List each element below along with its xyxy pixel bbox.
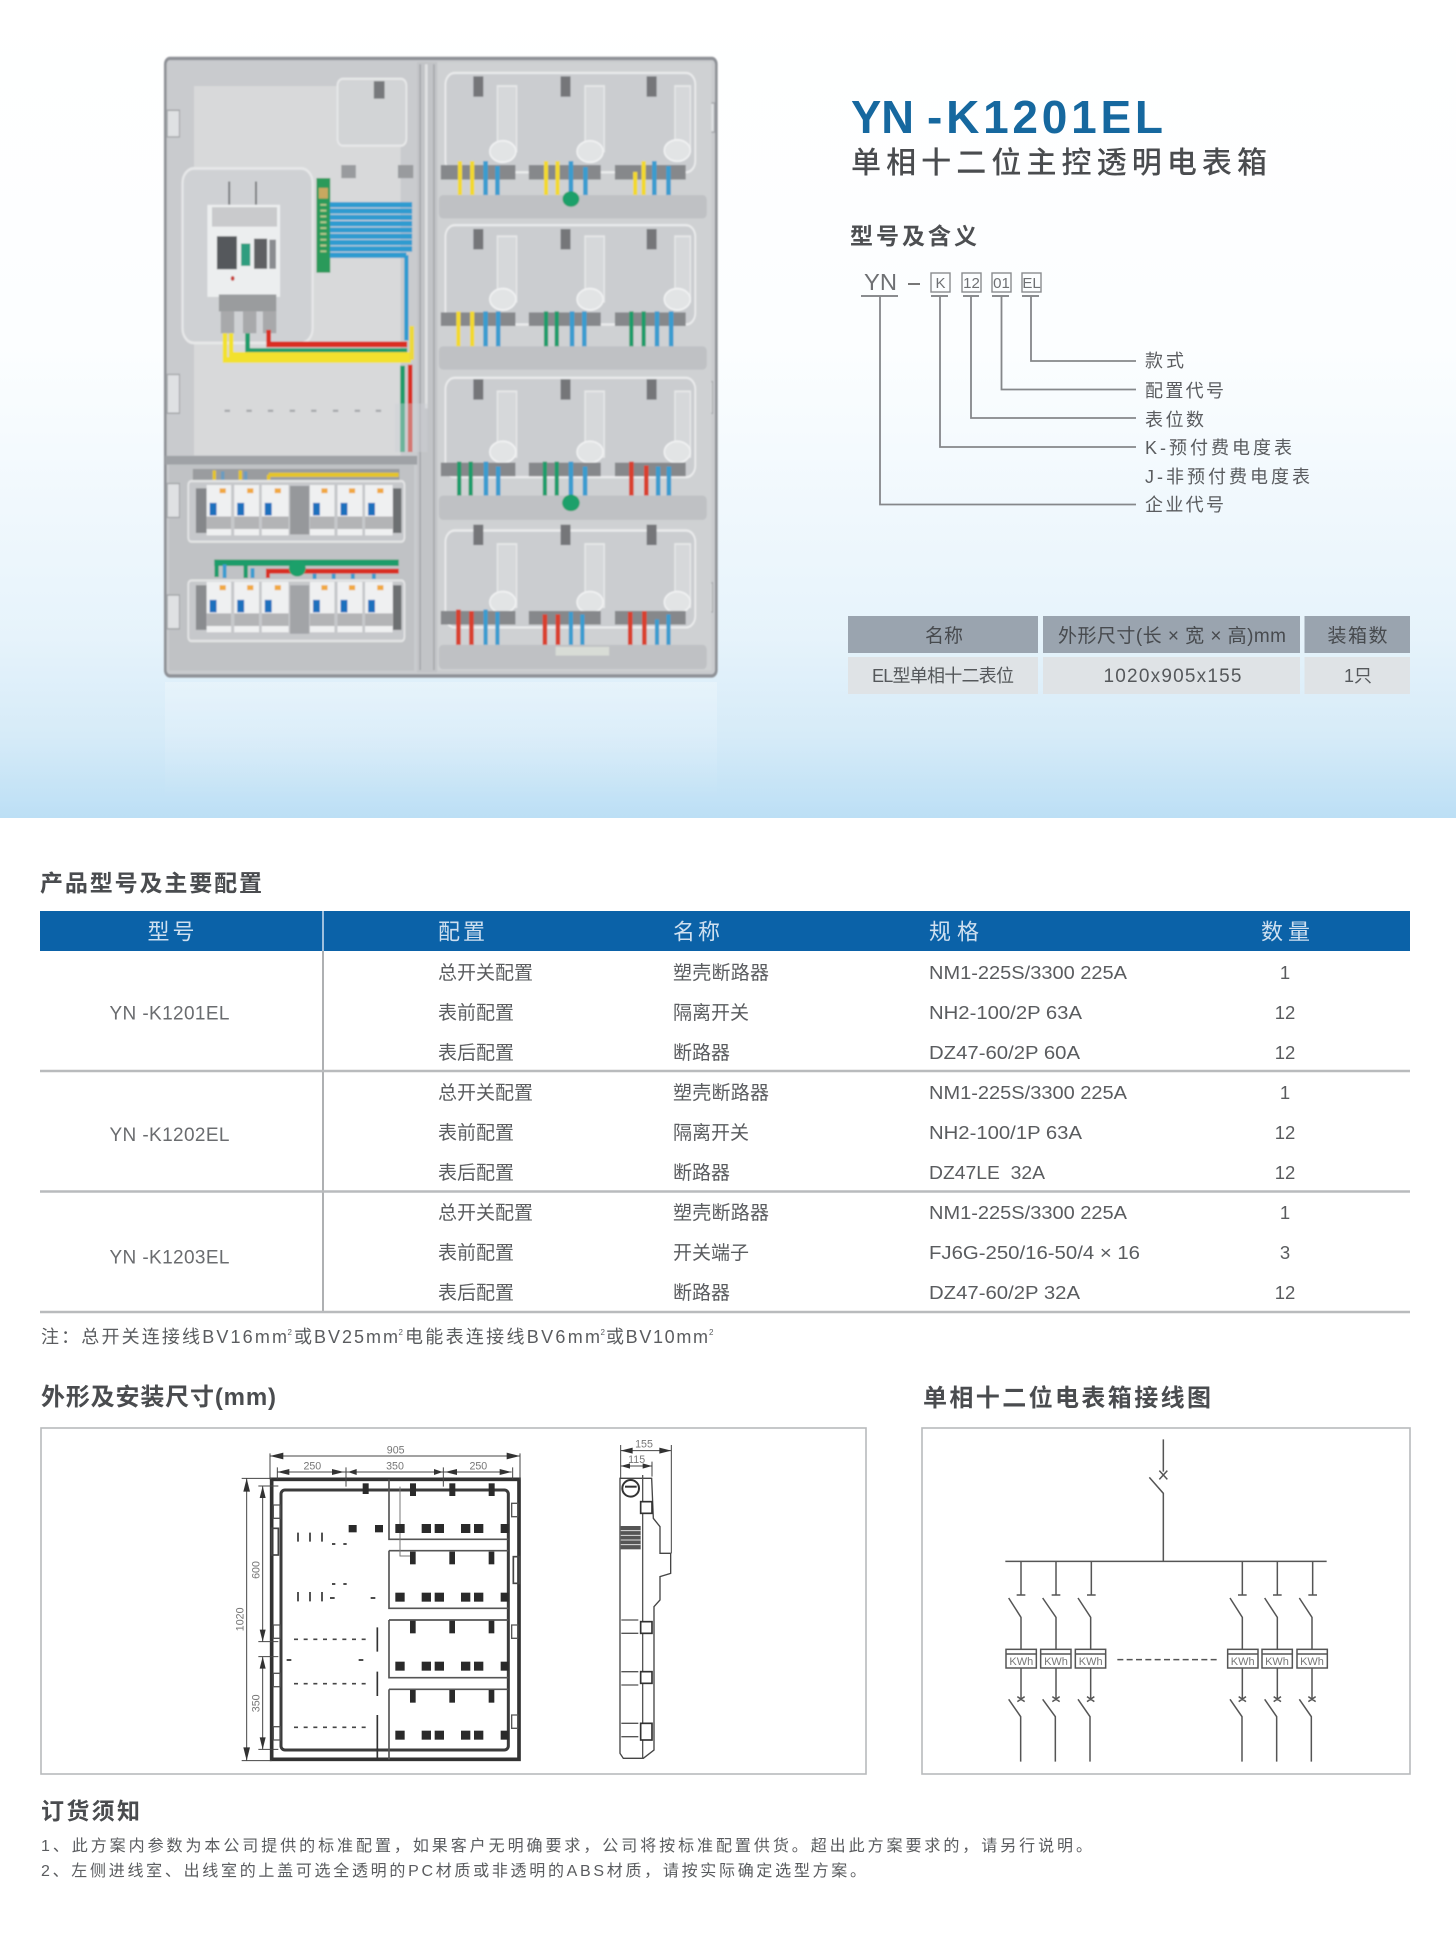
quantity column: 12 <box>1275 1122 1295 1143</box>
dimensions summary table: 1020x905x155 <box>1104 666 1242 687</box>
ordering notes text: 1、此方案内参数为本公司提供的标准配置，如果客户无明确要求，公司将按标准配置供货。超出此方案要求的，请另行说明。 <box>41 1837 1092 1855</box>
front outline drawing: 250 <box>469 1460 487 1472</box>
heading: product models and configuration: 产品型号及主要配置 <box>40 870 262 896</box>
compartment 3 <box>439 378 707 520</box>
table header bar: 配置 <box>438 920 485 944</box>
heading: ordering notes: 订货须知 <box>41 1798 140 1824</box>
front outline drawing <box>235 1444 520 1761</box>
side latches <box>167 103 714 629</box>
cabinet reflection <box>165 682 717 800</box>
dimensions summary table: EL型单相十二表位 <box>872 666 1014 686</box>
table footnote: 2 <box>600 1328 606 1337</box>
name column: 隔离开关 <box>673 1002 749 1024</box>
table header bar: 数量 <box>1261 920 1310 944</box>
heading: dimensions: 外形及安装尺寸(mm) <box>41 1384 276 1411</box>
front outline drawing: 1020 <box>235 1607 247 1631</box>
model code diagram: 12 <box>963 275 980 292</box>
lower left breaker compartment <box>165 456 418 671</box>
front outline drawing: 600 <box>251 1561 263 1579</box>
compartment 1 <box>439 73 707 218</box>
residual current breakers bottom row <box>207 582 393 632</box>
dimensions summary table: 名称 <box>925 625 963 647</box>
table footnote <box>41 1327 714 1347</box>
front outline drawing: 350 <box>386 1460 404 1472</box>
compartment 2 <box>439 225 707 370</box>
quantity column: 12 <box>1275 1282 1295 1303</box>
name column: 塑壳断路器 <box>673 1202 769 1224</box>
name column: 开关端子 <box>673 1242 749 1264</box>
model names: YN -K1202EL <box>110 1125 230 1146</box>
quantity column: 12 <box>1275 1162 1295 1183</box>
table footnote: 电能表连接线BV6mm <box>405 1327 600 1347</box>
table footnote: 2 <box>398 1328 404 1337</box>
table footnote: 注：总开关连接线BV16mm <box>41 1327 287 1347</box>
green seal 1 <box>562 191 579 207</box>
specification column: DZ47-60/2P 60A <box>929 1042 1081 1063</box>
table header bar <box>40 911 1410 951</box>
table footnote: 2 <box>288 1328 292 1337</box>
configuration column: 表后配置 <box>438 1042 514 1064</box>
name column: 断路器 <box>673 1162 730 1184</box>
front outline drawing: 250 <box>303 1460 321 1472</box>
configuration table <box>40 911 1410 1312</box>
specification column <box>929 962 1140 1303</box>
model names: YN -K1201EL <box>110 1004 230 1024</box>
table header bar: 规格 <box>929 920 979 944</box>
dimensions summary table: 装箱数 <box>1328 625 1388 647</box>
quantity column: 1 <box>1280 1202 1290 1223</box>
single line schematic: KWh <box>1231 1656 1255 1668</box>
single line schematic: KWh <box>1300 1656 1324 1668</box>
product subtitle: 单相十二位主控透明电表箱 <box>851 147 1267 180</box>
quantity column: 12 <box>1275 1042 1295 1063</box>
specification column: DZ47LE 32A <box>929 1162 1046 1183</box>
single line schematic: KWh <box>1009 1656 1033 1668</box>
name column: 断路器 <box>673 1282 730 1304</box>
specification column: NH2-100/2P 63A <box>929 1002 1083 1023</box>
model code diagram: EL <box>1022 275 1041 292</box>
configuration column: 总开关配置 <box>438 962 533 984</box>
table footnote: 2 <box>709 1328 714 1337</box>
quantity column <box>1275 962 1295 1303</box>
table footnote: 或BV25mm <box>294 1327 398 1347</box>
model code diagram: 01 <box>993 275 1010 292</box>
table header bar: 名称 <box>673 920 720 944</box>
left upper compartment <box>183 79 413 455</box>
side outline drawing: 115 <box>628 1454 645 1466</box>
product photo: transparent meter cabinet <box>165 58 716 676</box>
model code diagram: 企业代号 <box>1145 495 1224 515</box>
heading: model meaning: 型号及含义 <box>850 223 977 249</box>
coloured phase wires <box>225 326 412 452</box>
single line schematic: KWh <box>1265 1656 1289 1668</box>
quantity column: 3 <box>1280 1242 1290 1263</box>
model code diagram <box>861 269 1310 515</box>
table header bar: 型号 <box>148 920 194 944</box>
configuration column: 表前配置 <box>438 1242 514 1264</box>
front outline drawing: 905 <box>387 1444 405 1456</box>
model code diagram: J-非预付费电度表 <box>1145 467 1310 487</box>
configuration column: 表前配置 <box>438 1122 514 1144</box>
right meter compartments <box>438 62 711 671</box>
name column: 塑壳断路器 <box>673 962 769 984</box>
name column <box>673 962 769 1304</box>
table footnote: 或BV10mm <box>606 1327 708 1347</box>
configuration column: 总开关配置 <box>438 1082 533 1104</box>
dimensions summary table: 外形尺寸(长 × 宽 × 高)mm <box>1058 625 1286 647</box>
model code diagram: YN <box>864 269 897 295</box>
specification column: NM1-225S/3300 225A <box>929 1202 1128 1223</box>
model names <box>110 1004 230 1268</box>
configuration column: 表前配置 <box>438 1002 514 1024</box>
main breaker <box>207 182 280 333</box>
specification column: DZ47-60/2P 32A <box>929 1282 1081 1303</box>
quantity column: 1 <box>1280 1082 1290 1103</box>
specification column: NM1-225S/3300 225A <box>929 962 1128 983</box>
side outline drawing: 155 <box>635 1438 653 1450</box>
compartment 4 <box>439 525 707 669</box>
model code diagram: 配置代号 <box>1145 381 1224 401</box>
ordering notes text <box>41 1837 1092 1880</box>
single line schematic: KWh <box>1044 1656 1068 1668</box>
quantity column: 12 <box>1275 1002 1295 1023</box>
green terminal block <box>316 178 330 273</box>
configuration column: 表后配置 <box>438 1282 514 1304</box>
front outline drawing: 350 <box>251 1694 263 1712</box>
centre hinge <box>395 62 437 673</box>
blue neutral wires <box>330 205 412 341</box>
side outline drawing <box>620 1438 671 1758</box>
dimensions summary table: 1只 <box>1344 666 1372 686</box>
dimensions summary table <box>848 616 1410 694</box>
panel: wiring diagram <box>922 1428 1410 1774</box>
configuration column: 总开关配置 <box>438 1202 533 1224</box>
specification column: FJ6G-250/16-50/4 × 16 <box>929 1242 1140 1263</box>
model code diagram: K <box>935 275 946 292</box>
configuration column <box>438 962 533 1304</box>
model code diagram: 款式 <box>1145 351 1184 371</box>
panel: outline dimensions <box>41 1428 866 1774</box>
name column: 隔离开关 <box>673 1122 749 1144</box>
name column: 塑壳断路器 <box>673 1082 769 1104</box>
product title: YN <box>851 91 914 143</box>
specification column: NH2-100/1P 63A <box>929 1122 1083 1143</box>
configuration column: 表后配置 <box>438 1162 514 1184</box>
dimension lines <box>242 1453 520 1761</box>
heading: wiring diagram: 单相十二位电表箱接线图 <box>923 1384 1211 1412</box>
name column: 断路器 <box>673 1042 730 1064</box>
residual current breakers top row <box>207 485 393 535</box>
green seal 2 <box>562 495 580 511</box>
ordering notes text: 2、左侧进线室、出线室的上盖可选全透明的PC材质或非透明的ABS材质，请按实际确定选型方案。 <box>41 1862 866 1880</box>
single line schematic <box>1005 1439 1327 1762</box>
product title: -K1201EL <box>927 91 1163 143</box>
model code diagram: K-预付费电度表 <box>1145 438 1292 458</box>
single line schematic: KWh <box>1079 1656 1103 1668</box>
model code diagram: 表位数 <box>1145 410 1204 430</box>
header background gradient <box>0 0 1456 818</box>
quantity column: 1 <box>1280 962 1290 983</box>
specification column: NM1-225S/3300 225A <box>929 1082 1128 1103</box>
model names: YN -K1203EL <box>110 1248 230 1268</box>
cabinet body <box>165 58 716 676</box>
